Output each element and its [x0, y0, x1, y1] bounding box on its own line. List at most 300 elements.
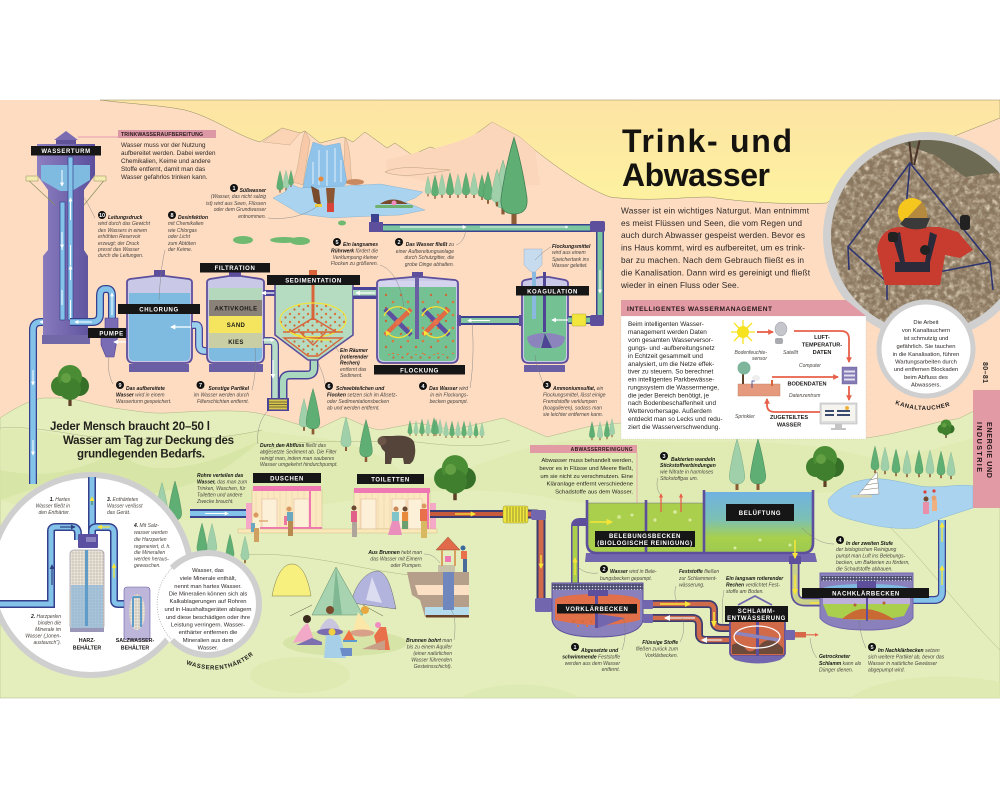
annotation 2: Belebungsbecken [577, 565, 657, 582]
annotation 5: Rührwerk: Flocken zu größeren. [331, 261, 378, 267]
annotation 1: Süßwasser: oder dem Grundwasser [214, 207, 266, 213]
circle: hard water text: Wasser. [198, 646, 219, 652]
annotation 6: Schwebteilchen: Flocken setzen sich im Absetz- [327, 392, 397, 398]
forest by the lake [425, 138, 527, 224]
tank: Koagulation: KOAGULATION [527, 289, 578, 295]
annotation 3: Bakterien: 3 [662, 454, 666, 460]
side tab [973, 390, 1000, 508]
circle: hard water text: Kalkablagerungen auf Rohren [169, 599, 247, 605]
annotation: Räumer: Rechen) [340, 360, 360, 366]
annotation 5: Rührwerk [331, 238, 404, 308]
annotation 3: Ammoniumsulfat: (koagulieren), sodass man [543, 406, 602, 412]
annotation 8: Desinfektion: 8 [170, 213, 174, 219]
building: Toiletten: TOILETTEN [371, 478, 410, 484]
tank: Filtration: SAND [227, 323, 246, 329]
annotation: Abfluss: abgesetzte Sediment ab. Die Filter [260, 450, 337, 456]
annotation 6: Schwebteilchen: ab und werden entfernt. [327, 406, 380, 412]
annotation 1: Süßwasser: (Wasser, das nicht salzig [211, 194, 266, 200]
callout: diver caption circle: Wartungsarbeiten durch [895, 360, 957, 366]
annotation 3: Bakterien: Stickstoffverbindungen [660, 463, 716, 469]
annotation: getrockneter Schlamm: Dünger dienen. [819, 668, 853, 674]
platform [238, 529, 437, 533]
annotation 10: Leitungsdruck: 10 [99, 213, 105, 219]
annotation 9: aufbereitetes Wasser: Das aufbereitete [126, 386, 165, 392]
annotation 9: aufbereitetes Wasser: 9 [118, 383, 122, 389]
annotation 4: Flockungsbecken: becken gepumpt. [430, 399, 468, 405]
annotation 8: Desinfektion: Desinfektion [178, 215, 208, 221]
arrow: satellite to server [794, 331, 849, 362]
annotation 2: Schutzgitter: 2 [397, 240, 401, 246]
icon: server [842, 367, 857, 384]
title [622, 123, 792, 193]
intro text: ins Haus kommt, wird es aufbereitet, um es trink- [621, 242, 805, 252]
annotation 10: Leitungsdruck: wird durch das Gewicht [98, 221, 151, 227]
softener labels: BEHÄLTER [121, 644, 149, 652]
softener step 4: gewaschen. [134, 563, 161, 569]
annotation 4: Flockungsbecken: 4 [421, 384, 425, 390]
pipes to drain [262, 293, 314, 398]
people at the buildings [251, 504, 427, 542]
annotation: getrockneter Schlamm: Schlamm kann als [819, 661, 862, 667]
peach background band [0, 100, 1000, 698]
panel body text: entdeckt man so Lecks und redu- [628, 416, 722, 423]
annotation 2: Schutzgitter: einer Aufbereitungsanlage [396, 249, 454, 255]
tank: Sedimentation: SEDIMENTATION [285, 278, 342, 284]
pipe tower to pump [70, 289, 112, 322]
annotation 3: Bakterien: Bakterien wandeln [671, 457, 715, 463]
circle: water softener [0, 472, 191, 675]
annotation 5: Nachklärbecken [859, 620, 945, 674]
pipe clarifier to lake [913, 520, 942, 600]
label: allocated water: WASSER [777, 422, 801, 428]
annotation 3: Ammoniumsulfat: 3 [545, 383, 549, 389]
annotation 8: Desinfektion: mit Chemikalien [168, 221, 204, 227]
annotation 3: Bakterien [657, 452, 716, 494]
annotation 7: sonstige Partikel [194, 348, 256, 405]
panel body text: ein intelligentes Parkbewässe- [628, 376, 714, 384]
building: Duschen: DUSCHEN [270, 476, 304, 482]
mountain ridge shading [263, 122, 540, 185]
tank: Belebungsbecken and Belüftung: (BIOLOGISCHE REINIGUNG) [597, 541, 693, 547]
icon labels: Satellit [783, 350, 799, 356]
annotation 8: Desinfektion: oder Licht [168, 234, 191, 240]
annotation: Räumer: entfernt das [340, 367, 367, 373]
pump: PUMPE [99, 332, 124, 338]
softener step 4: die Mineralien [134, 550, 165, 556]
annotation 2: Schutzgitter [395, 229, 466, 268]
trees right of panel [729, 419, 955, 490]
tank: Filtration: AKTIVKOHLE [214, 306, 258, 312]
annotation: Flüssige Stoffe [636, 618, 684, 659]
lake with waterfall and bathers [273, 142, 425, 218]
sewage pipe [430, 506, 528, 523]
annotation: Abfluss: Wasser umgekehrt hindurchpumpt. [260, 462, 338, 468]
tank: Sedimentation [267, 270, 360, 360]
annotation 2: Belebungsbecken: Wasser wird in Bele- [610, 569, 657, 575]
annotation 5: Nachklärbecken: abgepumpt wird. [868, 668, 905, 674]
heading label: Trinkwasseraufbereitung: TRINKWASSERAUFBEREITUNG [121, 132, 203, 138]
water tower [26, 131, 106, 344]
annotation 10: Leitungsdruck: erhöhten Reservoir [98, 234, 141, 240]
annotation: Brunnen bohrt: Wasser führenden [411, 658, 452, 664]
panel body text: gungs- und -aufbereitungsnetz [628, 345, 715, 352]
softener step 4: wasser werden [134, 530, 168, 536]
annotation 4: zweite Stufe [802, 528, 910, 572]
label: air temperature data: TEMPERATUR- [802, 342, 842, 348]
circle: hard water text: nennt man hartes Wasser. [174, 584, 242, 590]
annotation 9: aufbereitetes Wasser: Wasserturm gespeichert. [116, 399, 171, 405]
annotation 7: sonstige Partikel: Sonstige Partikel [208, 386, 250, 392]
annotation 1: Abgesetzte: schwimmende Feststoffe [562, 654, 620, 660]
circle: hard water text: Die Mineralien können sich als [169, 592, 247, 598]
annotation: Feststoffe: Feststoffe fließen [679, 569, 719, 575]
circle: hard water text: Mineralien aus dem [183, 638, 233, 644]
annotation 5: Nachklärbecken: Im Nachklärbecken setzen [878, 648, 940, 654]
text block: Trinkwasseraufbereitung: aufbereitet werden. Dabei werden [121, 150, 216, 157]
annotation: langsam rotierender Rechen [722, 576, 784, 625]
building: Toiletten [354, 474, 436, 529]
annotation 6: Schwebteilchen [318, 362, 397, 412]
headline: daily water need: grundlegenden Bedarfs. [77, 448, 205, 460]
annotation: Brunnen bohrt [406, 610, 455, 670]
blue main pipe from tower [33, 322, 62, 484]
annotation 1: Süßwasser [206, 184, 318, 220]
annotation 8: Desinfektion [159, 211, 208, 300]
text block: Trinkwasseraufbereitung: Wasser muss vor der Nutzung [121, 142, 206, 149]
yellow sky with mountain skyline [100, 100, 1000, 204]
camp site [272, 564, 407, 658]
annotation 8: Desinfektion: zum Abtöten [167, 241, 196, 247]
annotation 6: Schwebteilchen: oder Sedimentationsbecken [327, 399, 389, 405]
curved caption: Kanaltaucher: KANALTAUCHER [895, 400, 950, 410]
arrow: monitor to soil [767, 399, 820, 412]
annotation: Rohre verteilen: Wasser, das man zum [197, 480, 247, 486]
tank: Vorklärbecken [552, 583, 643, 637]
tank: Schlammentwässerung [725, 596, 818, 664]
tank: Nachklärbecken [802, 573, 929, 630]
callout: diver caption circle: Die Arbeit [913, 320, 939, 326]
softener step 1: Wasser fließt in [36, 504, 70, 510]
annotation 4: Flockungsbecken [419, 322, 473, 405]
softener step 1: 1. Hartes [50, 497, 70, 503]
text block: Trinkwasseraufbereitung: Chemikalien, Keime und andere [121, 158, 211, 165]
softener step 2: 2. Harzperlen [31, 614, 61, 620]
annotation 1: Süßwasser: 1 [232, 186, 236, 192]
softener step 4: die Harzperlen [134, 537, 167, 543]
softener step 1: den Enthärter. [38, 510, 70, 516]
pipe filtration to chlorination [192, 325, 207, 351]
arrow: soil to server [772, 376, 838, 378]
annotation: Räumer [332, 342, 369, 379]
tank: Flockung: FLOCKUNG [400, 368, 439, 374]
softener step 3: das Gerät. [107, 510, 130, 516]
panel body text: ziert die Wasserverschwendung. [628, 424, 720, 431]
annotation: Flüssige Stoffe: Flüssige Stoffe [642, 640, 678, 646]
tank: Nachklärbecken: NACHKLÄRBECKEN [832, 590, 900, 598]
annotation 2: Schutzgitter: Das Wasser fließt zu [406, 242, 454, 248]
annotation 5: Nachklärbecken: Wasser in natürliche Gewässer [868, 661, 937, 667]
annotation: Feststoffe: wässerung. [679, 582, 705, 588]
annotation: Brunnen bohrt: Brunnen bohrt man [406, 638, 452, 644]
tank: Flockung [374, 272, 465, 374]
annotation: Aus Brunnen [367, 550, 440, 569]
green landscape [0, 395, 1000, 698]
arrow: sun to satellite [757, 331, 773, 333]
green riser pipe [575, 522, 588, 598]
circle: hard water text: und in Haushaltsgeräten ablagern [164, 607, 252, 613]
annotation: Flockungsmittel: Speichertank ins [552, 257, 589, 263]
circle: hard water text: enthärter entfernen die [179, 630, 237, 636]
annotation 4: zweite Stufe: becken, um Bakterien zu fördern, [836, 560, 910, 566]
annotation 1: Süßwasser: Süßwasser [240, 188, 267, 194]
softener labels: BEHÄLTER [73, 644, 101, 652]
callout: diver caption circle [879, 302, 973, 396]
icon: soil with tree and sprinkler [738, 362, 780, 396]
panel body text: tiver zu steuern. So berechnet [628, 368, 713, 376]
icon labels: sensor [752, 356, 767, 362]
tank: Filtration: FILTRATION [215, 266, 255, 272]
firs behind softener [156, 481, 249, 563]
pipe aeration to secondary clarifier [789, 540, 830, 603]
annotation 2: Belebungsbecken: bungsbecken gepumpt. [600, 576, 652, 582]
panel: intelligent water management: INTELLIGENTES WASSERMANAGEMENT [627, 306, 772, 313]
annotation: Flockungsmittel: Wasser geleitet. [552, 263, 588, 269]
annotation: Feststoffe [675, 569, 719, 602]
pipe intake to coagulation [369, 214, 605, 326]
annotation 10: Leitungsdruck: durch die Leitungen. [98, 253, 143, 259]
panel body text: management werden Daten [628, 329, 707, 336]
annotation 4: zweite Stufe: In der zweiten Stufe [846, 541, 893, 547]
annotation 10: Leitungsdruck: presst das Wasser [97, 247, 140, 253]
softener step 3: 3. Enthärtetes [107, 497, 138, 503]
softener labels [73, 638, 155, 652]
drain filter [267, 398, 289, 411]
annotation 9: aufbereitetes Wasser [108, 355, 171, 405]
tank: Belebungsbecken and Belüftung: BELÜFTUNG [739, 510, 781, 517]
annotation 4: zweite Stufe: pumpt man Luft ins Belebungs- [835, 554, 906, 560]
annotation 5: Rührwerk: Verklumpung kleiner [333, 255, 378, 261]
icon: brine tank [124, 587, 150, 640]
annotation 9: aufbereitetes Wasser: Wasser wird in einem [116, 392, 165, 398]
annotation 10: Leitungsdruck [84, 198, 151, 259]
softener step 4: werden heraus- [134, 556, 169, 562]
annotation 6: Schwebteilchen: 6 [327, 384, 331, 390]
curved caption: Wasserenthärter: WASSERENTHÄRTER [187, 652, 254, 670]
panel body text: in Echtzeit gesammelt und [628, 353, 703, 360]
annotation 4: zweite Stufe: 4 [838, 538, 842, 544]
annotation: Brunnen bohrt: (einer natürlichen [413, 651, 452, 657]
callout: diver caption circle: ist schmutzig und [904, 336, 948, 342]
annotation 1: Abgesetzte: Abgesetzte und [580, 648, 619, 654]
annotation: langsam rotierender Rechen: Rechen verdichtet Fest- [726, 582, 780, 588]
annotation: Rohre verteilen: Trinken, Waschen, für [197, 486, 246, 492]
annotation: Abfluss [258, 411, 338, 468]
annotation: getrockneter Schlamm: Getrockneter [819, 654, 851, 660]
circle: hard water text: Leistung verringern. Wasser- [171, 622, 245, 628]
softener step 2: austausch“). [33, 640, 61, 646]
annotation: Rohre verteilen: Toiletten und andere [197, 492, 243, 498]
icon: resin tank [70, 534, 104, 632]
softener step 4: 4. Mit Salz- [134, 523, 159, 529]
annotation 2: Schutzgitter: durch Schutzgitter, die [405, 255, 454, 261]
callout: diver caption circle: beim Abfluss des [904, 375, 948, 381]
callout: diver caption circle: in die Kanalisation, führen [893, 352, 959, 358]
arrow: server to monitor [848, 386, 850, 400]
label: air temperature data: DATEN [813, 350, 831, 356]
icon labels: Bodenfeuchte- [734, 350, 767, 356]
panel body text: analysiert, um die Netze effek- [628, 361, 714, 368]
tank: Vorklärbecken: VORKLÄRBECKEN [566, 606, 628, 613]
annotation 4: zweite Stufe: die Schadstoffe abbauen. [836, 566, 893, 572]
heading label: Trinkwasseraufbereitung [78, 130, 216, 138]
panel body text: die jeder Bereich benötigt, je [628, 392, 709, 400]
intro text: Wasser ist ein wichtiges Naturgut. Man entnimmt [621, 206, 810, 216]
annotation: Flüssige Stoffe: fließen zurück zum [636, 646, 678, 652]
text block: Trinkwasseraufbereitung: Stoffe entfernt, damit man das [121, 166, 205, 173]
softener step 4: regeneriert, d. h. [134, 544, 171, 550]
annotation 4: zweite Stufe: der biologischen Reinigung [836, 547, 897, 553]
icon labels [734, 350, 821, 420]
headline: daily water need: Wasser am Tag zur Deckung des [63, 435, 234, 447]
softener labels: HARZ- [79, 638, 95, 644]
annotation: langsam rotierender Rechen: Ein langsam rotierender [726, 576, 784, 582]
annotation 10: Leitungsdruck: Leitungsdruck [108, 215, 143, 221]
annotation 1: Abgesetzte: entfernt. [602, 667, 620, 673]
callout: diver caption circle: Abwassers. [911, 382, 941, 388]
text block: Abwasserreinigung: um sie nicht zu verschmutzen. Eine [540, 474, 634, 480]
annotation 2: Belebungsbecken: 2 [602, 567, 606, 573]
pump [88, 318, 135, 357]
annotation 1: Süßwasser: ist) wird aus Seen, Flüssen [206, 201, 266, 207]
annotation: langsam rotierender Rechen: stoffe am Boden. [726, 589, 764, 595]
annotation: Rohre verteilen: Rohre verteilen das [197, 473, 244, 479]
annotation 3: Bakterien: wie Nitrate in harmloses [660, 470, 714, 476]
circle: hard water text: Wasser, das [192, 568, 224, 574]
title: Trink- und [622, 123, 792, 159]
tank: Schlammentwässerung: SCHLAMM- [738, 609, 775, 615]
small shrubs [233, 220, 346, 245]
annotation: Rohre verteilen: Zwecke braucht. [196, 499, 234, 505]
annotation: Räumer: (rotierender [340, 354, 369, 360]
tank: Filtration [200, 263, 270, 372]
intro text [620, 206, 811, 290]
annotation: Abfluss: Durch den Abfluss fließt das [260, 443, 326, 449]
intro text: wieder in einen Fluss oder See. [620, 280, 739, 290]
annotation: Brunnen bohrt: bis zu einem Aquifer [407, 644, 452, 650]
tank: Belebungsbecken and Belüftung [585, 490, 817, 562]
page number: 80–81 [981, 362, 988, 383]
icon labels: Sprinkler [735, 414, 755, 420]
callout: diver caption circle: von Kanaltauchern [902, 328, 950, 334]
bear [378, 436, 415, 464]
tank: Chlorung [118, 270, 200, 372]
headline: daily water need: Jeder Mensch braucht 20–50 l [50, 421, 210, 433]
callout: diver caption circle: gefährlich. Sie tauchen [897, 344, 955, 350]
softener step 2: binden die [38, 620, 61, 626]
text heading: Abwasserreinigung: ABWASSERREINIGUNG [571, 447, 633, 453]
annotation 3: Ammoniumsulfat: Fremdstoffe verklumpen [543, 399, 597, 405]
annotation 1: Süßwasser: entnommen. [238, 214, 266, 220]
tank: Koagulation [516, 249, 589, 372]
annotation 5: Nachklärbecken: 5 [870, 645, 874, 651]
label: allocated water: ZUGETEILTES [770, 415, 808, 421]
well with aquifer cross-section [407, 537, 469, 618]
main supply pipe to buildings [190, 509, 255, 518]
text block: Abwasserreinigung: bevor es in Flüsse und Meere fließt, [539, 466, 633, 472]
annotation 1: Abgesetzte: werden aus dem Wasser [565, 661, 620, 667]
annotation 7: sonstige Partikel: Filterschichten entfernt. [197, 399, 249, 405]
softener step 3: Wasser verlässt [107, 504, 143, 510]
text block: Abwasserreinigung: Schadstoffe aus dem Wasser. [555, 490, 633, 496]
annotation: Räumer: Ein Räumer [340, 348, 369, 354]
panel body text: Wettervorhersage. Außerdem [628, 408, 712, 415]
title: Abwasser [622, 157, 770, 193]
panel: intelligent water management [621, 300, 866, 439]
annotation: Räumer: Sediment. [340, 373, 363, 379]
headline: daily water need [50, 421, 234, 460]
annotation 4: Flockungsbecken: Das Wasser wird [429, 386, 468, 392]
text heading: Abwasserreinigung [530, 445, 637, 530]
annotation: Aus Brunnen: Aus Brunnen hebt man [367, 550, 422, 556]
annotation 3: Ammoniumsulfat [535, 355, 606, 418]
annotation 7: sonstige Partikel: im Wasser werden durch [194, 392, 249, 398]
round tree [434, 455, 476, 500]
tree on hill [51, 365, 89, 406]
pipe flocculation to sedimentation [353, 287, 377, 299]
annotation 1: Abgesetzte [562, 618, 625, 673]
annotation: getrockneter Schlamm [810, 638, 862, 674]
label: air temperature data: LUFT- [814, 335, 830, 341]
text block: Abwasserreinigung: Abwasser muss behandelt werden, [541, 458, 633, 464]
annotation 5: Rührwerk: Ein langsames [343, 242, 378, 248]
tank: Chlorung: CHLORUNG [139, 308, 179, 314]
photo: sewer diver [823, 132, 1000, 330]
circle: hard water text [157, 553, 259, 655]
circle: hard water text: viele Minerale enthält, [180, 576, 237, 582]
annotation 3: Bakterien: Stickstoffgas um. [660, 476, 698, 482]
annotation 5: Rührwerk: 5 [335, 240, 339, 246]
annotation 3: Ammoniumsulfat: sie leichter entfernen kann. [543, 412, 603, 418]
icon: data centre monitor [820, 403, 857, 430]
annotation 4: Flockungsbecken: in ein Flockungs- [430, 392, 468, 398]
circle: hard water text: und diese beschädigen oder ihre [166, 615, 250, 621]
side tab: INDUSTRIE [975, 422, 984, 472]
annotation 7: sonstige Partikel: 7 [199, 383, 202, 389]
icon: satellite [775, 322, 787, 344]
fir forest [408, 418, 615, 440]
annotation: Aus Brunnen: das Wasser mit Eimern [370, 556, 422, 562]
lake with windsurfer and swimmers [828, 472, 973, 529]
panel body text: vom gesamten Wasserversor- [628, 337, 713, 344]
annotation: Flüssige Stoffe: Vorklärbecken. [645, 653, 678, 659]
sludge pipes [643, 600, 730, 640]
annotation 5: Rührwerk: Rührwerk fördert die [331, 248, 378, 254]
softener step 2: Minerale im [35, 627, 61, 633]
annotation 6: Schwebteilchen: Schwebteilchen und [336, 386, 385, 392]
annotation 10: Leitungsdruck: des Wassers in einem [98, 228, 147, 234]
tank: Schlammentwässerung: ENTWÄSSERUNG [727, 615, 786, 622]
annotation 2: Schutzgitter: grobe Dinge abhalten. [405, 262, 454, 268]
annotation: Brunnen bohrt: Gesteinsschicht). [414, 664, 452, 670]
text block: Trinkwasseraufbereitung: Wasser gefahrlos trinken kann. [121, 174, 208, 181]
intro text: bar zu machen. Nach dem Gebrauch fließt es in [621, 255, 804, 265]
annotation 8: Desinfektion: wie Chlorgas [168, 228, 197, 234]
pipe coagulation to flocculation [457, 315, 523, 326]
side tab: ENERGIE UND [985, 422, 994, 478]
annotation 8: Desinfektion: der Keime. [168, 247, 192, 253]
pipe to primary clarifier [528, 510, 556, 612]
annotation 10: Leitungsdruck: erzeugt; der Druck [98, 241, 140, 247]
